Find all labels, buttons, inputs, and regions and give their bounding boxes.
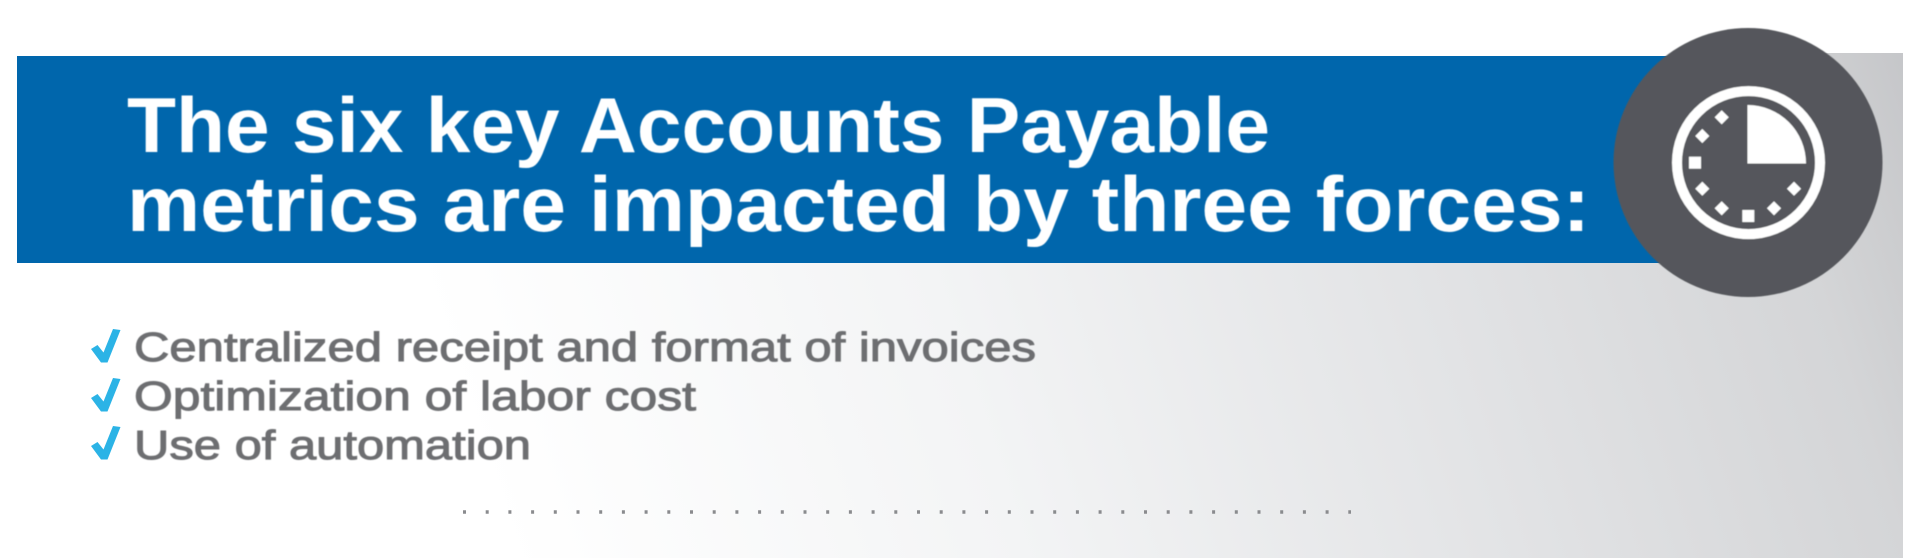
title: The six key Accounts Payable xyxy=(127,81,1270,169)
item: centralized receipt: Centralized receipt and format of invoices xyxy=(134,324,1036,370)
icon: clock badge xyxy=(1614,28,1882,297)
item: use of automation: Use of automation xyxy=(134,422,531,468)
title xyxy=(127,81,1590,248)
title: metrics are impacted by three forces: xyxy=(127,160,1590,248)
item: optimization of labor cost: Optimization of labor cost xyxy=(134,373,697,419)
checklist xyxy=(91,324,1036,468)
panel: blue title banner xyxy=(17,56,1677,263)
